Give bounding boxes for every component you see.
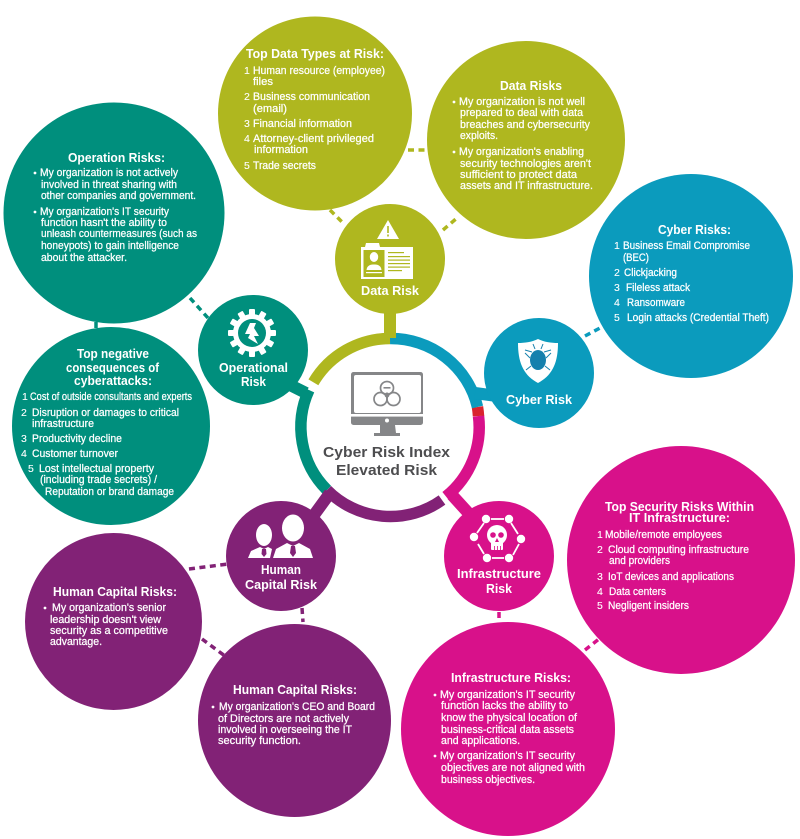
- panel: infrastructure risks: Infrastructure Risks:: [451, 671, 571, 685]
- panel: top security risks within IT infrastructure: and providers: [609, 555, 670, 567]
- panel: human capital risks, CEO and board: [198, 624, 391, 817]
- panel: cyber risks: 5: [614, 312, 620, 324]
- panel: top negative consequences of cyberattacks: 1: [22, 391, 28, 403]
- node: operational risk: [198, 295, 308, 405]
- icon: two business people: [248, 514, 313, 558]
- panel: operation risks: My organization is not actively: [40, 167, 178, 179]
- panel: cyber risks: Fileless attack: [626, 282, 690, 294]
- ring stems: [288, 308, 497, 517]
- panel: top negative consequences of cyberattacks: Customer turnover: [32, 448, 118, 460]
- node: operational risk: Operational: [219, 361, 288, 375]
- panel: top data types at risk: 4: [244, 133, 250, 145]
- node: infrastructure risk: [444, 501, 554, 611]
- panel: top security risks within IT infrastructure: Mobile/remote employees: [605, 529, 722, 541]
- panel: data risks: breaches and cybersecurity: [460, 119, 590, 131]
- panel: human capital risks, CEO and board: security function.: [218, 735, 301, 747]
- panel: human capital risks, senior leadership: security as a competitive: [50, 625, 168, 637]
- panel: top negative consequences of cyberattacks: 5: [28, 463, 34, 475]
- panel: top data types at risk: (email): [253, 103, 287, 115]
- panel: top data types at risk: Business communication: [253, 91, 370, 103]
- panel: top negative consequences of cyberattacks: Cost of outside consultants and experts: [30, 391, 192, 403]
- panel: cyber risks: 3: [614, 282, 620, 294]
- panel: top negative consequences of cyberattacks: 4: [21, 448, 27, 460]
- panel: human capital risks, CEO and board: of Directors are not actively: [218, 713, 349, 725]
- panel: top data types at risk: 3: [244, 118, 250, 130]
- panel: top negative consequences of cyberattacks: 2: [21, 407, 27, 419]
- panel: operation risks: function hasn't the ability to: [41, 217, 167, 229]
- panel: human capital risks, CEO and board: involved in overseeing the IT: [218, 724, 352, 736]
- panel: top negative consequences of cyberattacks: consequences of: [66, 361, 160, 375]
- panel: top security risks within IT infrastructure: 2: [597, 544, 603, 556]
- icon: shield with bug: [518, 339, 558, 383]
- panel: top security risks within IT infrastructure: Cloud computing infrastructure: [608, 544, 749, 556]
- panel: cyber risks: 1: [614, 240, 620, 252]
- panel: cyber risks: (BEC): [623, 252, 649, 264]
- node: data risk: [335, 204, 445, 314]
- panel: top data types at risk: Financial information: [253, 118, 352, 130]
- panel: human capital risks, senior leadership: advantage.: [50, 636, 102, 648]
- panel: top negative consequences of cyberattacks: [12, 327, 210, 525]
- dashed connectors: [96, 150, 600, 656]
- panel: top security risks within IT infrastructure: 4: [597, 586, 603, 598]
- panel: cyber risks: 4: [614, 297, 620, 309]
- panel: infrastructure risks: know the physical location of: [441, 712, 578, 724]
- panel: infrastructure risks: My organization's IT security: [440, 689, 575, 701]
- panel: operation risks: involved in threat sharing with: [41, 179, 177, 191]
- panel: operation risks: honeypots) to gain intelligence: [41, 240, 179, 252]
- node: human capital risk: Human: [261, 563, 301, 577]
- panel: top negative consequences of cyberattacks: Reputation or brand damage: [45, 486, 174, 498]
- icon: monitor with biohazard: [351, 372, 423, 436]
- panel: top negative consequences of cyberattacks: Productivity decline: [32, 433, 122, 445]
- panel: top data types at risk: information: [254, 144, 308, 156]
- panel: top data types at risk: Human resource (employee): [253, 65, 385, 77]
- panel: data risks: exploits.: [460, 130, 498, 142]
- panel: operation risks: other companies and government.: [41, 190, 196, 202]
- heading: Cyber Risk Index: [323, 445, 450, 461]
- panel: cyber risks: Login attacks (Credential Theft): [627, 312, 769, 324]
- panel: human capital risks, senior leadership: My organization's senior: [52, 602, 166, 614]
- panel: data risks: security technologies aren't: [460, 158, 591, 170]
- node: cyber risk: [484, 318, 594, 428]
- panel: human capital risks, CEO and board: My organization's CEO and Board: [219, 701, 375, 713]
- panel: cyber risks: Ransomware: [627, 297, 685, 309]
- panel: top data types at risk: [218, 16, 412, 210]
- panel: operation risks: about the attacker.: [41, 252, 127, 264]
- panel: top security risks within IT infrastructure: 5: [597, 600, 603, 612]
- panel: top negative consequences of cyberattacks: 3: [21, 433, 27, 445]
- panel: human capital risks, CEO and board: Human Capital Risks:: [233, 683, 357, 697]
- panel: top data types at risk: Attorney-client privileged: [253, 133, 374, 145]
- panel: top data types at risk: 2: [244, 91, 250, 103]
- panel: top negative consequences of cyberattacks: Disruption or damages to critical: [32, 407, 179, 419]
- panel: top negative consequences of cyberattacks: (including trade secrets) /: [40, 474, 158, 486]
- panel: cyber risks: Cyber Risks:: [658, 223, 731, 237]
- panel: data risks: assets and IT infrastructure.: [460, 180, 593, 192]
- panel: operation risks: unleash countermeasures (such as: [41, 228, 197, 240]
- panel: top negative consequences of cyberattacks: infrastructure: [32, 418, 94, 430]
- node: operational risk: Risk: [241, 375, 266, 389]
- panel: top security risks within IT infrastructure: IoT devices and applications: [608, 571, 734, 583]
- panel: data risks: My organization's enabling: [459, 146, 584, 158]
- icon: skull in network: [470, 515, 525, 562]
- panel: top data types at risk: 1: [244, 65, 250, 77]
- panel: cyber risks: Clickjacking: [624, 267, 677, 279]
- panel: human capital risks, senior leadership: Human Capital Risks:: [53, 585, 177, 599]
- panel: top security risks within IT infrastructure: 3: [597, 571, 603, 583]
- panel: cyber risks: Business Email Compromise: [623, 240, 750, 252]
- panel: infrastructure risks: business objectives.: [441, 774, 535, 786]
- panel: data risks: sufficient to protect data: [460, 169, 578, 181]
- panel: top negative consequences of cyberattacks: Lost intellectual property: [39, 463, 154, 475]
- node: infrastructure risk: Infrastructure: [457, 567, 541, 581]
- panel: data risks: My organization is not well: [459, 96, 585, 108]
- node: cyber risk: Cyber Risk: [506, 393, 572, 407]
- panel: data risks: Data Risks: [500, 79, 562, 93]
- panel: top data types at risk: Trade secrets: [253, 160, 316, 172]
- node: infrastructure risk: Risk: [486, 582, 512, 596]
- panel: cyber risks: 2: [614, 267, 620, 279]
- node: human capital risk: [226, 501, 336, 611]
- icon: gear with lightning bolt: [228, 309, 276, 357]
- panel: infrastructure risks: business-critical data assets: [441, 724, 574, 736]
- panel: infrastructure risks: objectives are not aligned with: [441, 762, 585, 774]
- panel: infrastructure risks: My organization's IT security: [440, 750, 575, 762]
- panel: infrastructure risks: and applications.: [441, 735, 520, 747]
- node: data risk: Data Risk: [361, 284, 419, 298]
- panel: human capital risks, senior leadership: leadership doesn't view: [50, 614, 161, 626]
- panel: operation risks: Operation Risks:: [68, 151, 165, 165]
- panel: human capital risks, senior leadership: [25, 533, 202, 710]
- center: Cyber Risk Index: [323, 372, 450, 479]
- panel: top data types at risk: Top Data Types at Risk:: [246, 47, 384, 61]
- panel: top security risks within IT infrastructure: Data centers: [609, 586, 666, 598]
- panel: operation risks: [4, 102, 224, 324]
- node: human capital risk: Capital Risk: [245, 578, 317, 592]
- panel: top security risks within IT infrastructure: 1: [597, 529, 603, 541]
- panel: top negative consequences of cyberattacks: Top negative: [77, 347, 149, 361]
- panel: cyber risks: [589, 174, 793, 378]
- panel: top security risks within IT infrastructure: Negligent insiders: [608, 600, 689, 612]
- panel: top negative consequences of cyberattacks: cyberattacks:: [74, 374, 152, 388]
- panel: operation risks: My organization's IT security: [40, 206, 169, 218]
- panel: infrastructure risks: function lacks the ability to: [441, 700, 568, 712]
- panel: infrastructure risks: [401, 622, 615, 836]
- center: Cyber Risk Index: Elevated Risk: [336, 463, 438, 479]
- panel: top security risks within IT infrastructure: IT Infrastructure:: [629, 511, 730, 525]
- panel: top security risks within IT infrastructure: [567, 446, 795, 674]
- central ring: [301, 338, 479, 517]
- panel: top security risks within IT infrastructure: Top Security Risks Within: [605, 500, 754, 514]
- panel: top data types at risk: files: [253, 76, 274, 88]
- icon: warning triangle and ID card: [361, 220, 413, 279]
- panel: top data types at risk: 5: [244, 160, 250, 172]
- panel: data risks: prepared to deal with data: [460, 107, 584, 119]
- panel: data risks: [427, 41, 625, 239]
